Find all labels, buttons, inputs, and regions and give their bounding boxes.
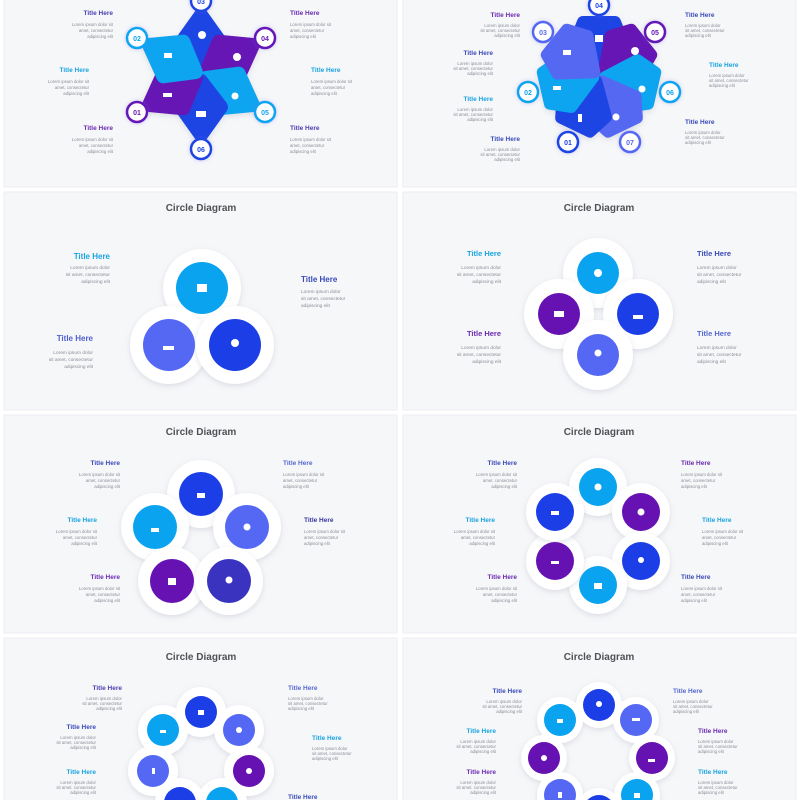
panel: six circles: Lorem ipsum dolor sit bbox=[681, 472, 723, 477]
panel: seven-petal diagram: Lorem ipsum dolor bbox=[457, 107, 494, 112]
text blocks bbox=[465, 460, 732, 581]
panel: seven circles: Lorem ipsum dolor bbox=[312, 746, 348, 751]
panel: six circles: adipiscing elit bbox=[469, 541, 496, 546]
panel: seven circles: Lorem ipsum dolor bbox=[60, 780, 97, 785]
text blocks: Title Here bbox=[83, 10, 113, 17]
panel: eight circles: adipiscing elit bbox=[470, 790, 497, 795]
icons bbox=[163, 31, 241, 117]
panel: seven-petal diagram: Lorem ipsum dolor bbox=[709, 73, 745, 78]
panel: seven circles: adipiscing elit bbox=[70, 790, 97, 795]
panel: three circles: Lorem ipsum dolor bbox=[301, 289, 341, 295]
panel: five circles: amet, consectetur bbox=[86, 478, 121, 483]
panel: five circles: Lorem ipsum dolor sit bbox=[304, 529, 346, 534]
heading: Circle Diagram bbox=[564, 203, 634, 214]
panel: seven circles: Lorem ipsum dolor bbox=[60, 735, 97, 740]
panel: six circles: adipiscing elit bbox=[491, 598, 518, 603]
text blocks: Title Here bbox=[74, 252, 111, 261]
panel: seven-petal diagram: Title Here bbox=[685, 119, 715, 126]
panel: five circles: adipiscing elit bbox=[304, 541, 331, 546]
text blocks: Title Here bbox=[92, 685, 122, 692]
panel: seven circles: sit amet, consectetur bbox=[82, 701, 123, 706]
panel: eight circles: adipiscing elit bbox=[470, 749, 497, 754]
panel: three circles: sit amet, consectetur bbox=[301, 296, 346, 302]
text blocks: Title Here bbox=[466, 728, 496, 735]
text blocks: Title Here bbox=[487, 460, 517, 467]
panel: five circles: adipiscing elit bbox=[94, 598, 121, 603]
panel: seven-petal diagram: adipiscing elit bbox=[467, 71, 494, 76]
panel: seven-petal diagram: adipiscing elit bbox=[494, 33, 521, 38]
text blocks: Title Here bbox=[492, 688, 522, 695]
panel: five circles bbox=[56, 427, 346, 615]
panel: six-petal diagram: amet, consectetur bbox=[55, 85, 90, 90]
text blocks: Title Here bbox=[301, 275, 338, 284]
text blocks: Title Here bbox=[67, 517, 97, 524]
panel: six-petal diagram: amet, consectetur bbox=[290, 28, 325, 33]
text blocks: Title Here bbox=[698, 728, 728, 735]
panel: five circles: amet, consectetur bbox=[86, 592, 121, 597]
panel: seven circles: Lorem ipsum dolor bbox=[288, 696, 324, 701]
panel: eight circles: sit amet, consectetur bbox=[673, 704, 713, 709]
panel: seven-petal diagram: adipiscing elit bbox=[685, 33, 712, 38]
panel: seven circles: sit amet, consectetur bbox=[56, 740, 97, 745]
panel: seven-petal diagram: sit amet, consectetur bbox=[453, 66, 494, 71]
panel: seven-petal diagram: 03 bbox=[539, 30, 547, 37]
circles bbox=[121, 460, 281, 615]
panel: six circles: amet, consectetur bbox=[681, 478, 716, 483]
panel: seven-petal diagram: Lorem ipsum dolor bbox=[484, 23, 521, 28]
text blocks: Title Here bbox=[467, 249, 501, 258]
panel: six-petal diagram: adipiscing elit bbox=[311, 91, 338, 96]
petals bbox=[139, 15, 263, 135]
panel: eight circles: sit amet, consectetur bbox=[456, 785, 497, 790]
panel: six-petal diagram: 01 bbox=[133, 110, 141, 117]
panel: six-petal diagram: amet, consectetur bbox=[311, 85, 346, 90]
panel: six-petal diagram: 05 bbox=[261, 110, 269, 117]
text blocks bbox=[467, 249, 731, 338]
panel: seven-petal diagram: Title Here bbox=[685, 12, 715, 19]
text blocks bbox=[466, 688, 728, 776]
panel: seven-petal diagram: 05 bbox=[651, 30, 659, 37]
panel: seven-petal diagram: 01 bbox=[564, 140, 572, 147]
text blocks: Title Here bbox=[466, 769, 496, 776]
panel: seven-petal diagram: 04 bbox=[595, 3, 603, 10]
panel: five circles: amet, consectetur bbox=[304, 535, 339, 540]
petals bbox=[541, 22, 657, 135]
panel: seven circles: adipiscing elit bbox=[288, 706, 315, 711]
panel: six-petal diagram: Lorem ipsum dolor sit bbox=[72, 137, 114, 142]
panel: seven-petal diagram: sit amet, consectetur bbox=[685, 28, 725, 33]
panel: eight circles: Lorem ipsum dolor bbox=[486, 699, 523, 704]
panel: seven-petal diagram: adipiscing elit bbox=[467, 117, 494, 122]
text blocks: Title Here bbox=[90, 574, 120, 581]
panel: six-petal diagram bbox=[48, 0, 353, 159]
panel: six circles: amet, consectetur bbox=[702, 535, 737, 540]
panel: three circles: sit amet, consectetur bbox=[66, 272, 110, 278]
text blocks bbox=[59, 10, 113, 132]
circles bbox=[524, 238, 673, 390]
panel: seven circles: adipiscing elit bbox=[312, 756, 339, 761]
panel: seven circles: Lorem ipsum dolor bbox=[86, 696, 123, 701]
panel: seven circles: sit amet, consectetur bbox=[288, 701, 328, 706]
panel: seven-petal diagram: Lorem ipsum dolor bbox=[685, 23, 721, 28]
panel: eight circles: adipiscing elit bbox=[698, 749, 725, 754]
panel: seven circles: sit amet, consectetur bbox=[312, 751, 352, 756]
panel: six-petal diagram: Title Here bbox=[290, 10, 320, 17]
panel: four circles bbox=[457, 203, 742, 390]
text blocks: Title Here bbox=[59, 67, 89, 74]
text blocks: Title Here bbox=[463, 50, 493, 57]
panel: eight circles: sit amet, consectetur bbox=[698, 785, 738, 790]
panel: seven-petal diagram bbox=[453, 0, 749, 162]
panel: six circles: amet, consectetur bbox=[483, 478, 518, 483]
panel: six-petal diagram: 02 bbox=[133, 36, 141, 43]
panel: seven-petal diagram: Lorem ipsum dolor bbox=[685, 130, 721, 135]
panel: six circles: Lorem ipsum dolor sit bbox=[476, 586, 518, 591]
heading: Circle Diagram bbox=[564, 427, 634, 438]
panel: seven circles: sit amet, consectetur bbox=[56, 785, 97, 790]
panel: three circles: adipiscing elit bbox=[64, 364, 94, 370]
panel: eight circles: Lorem ipsum dolor bbox=[460, 780, 497, 785]
panel: eight circles: sit amet, consectetur bbox=[482, 704, 523, 709]
panel: seven circles bbox=[56, 652, 352, 800]
panel: five circles: amet, consectetur bbox=[63, 535, 98, 540]
panel: eight circles: Lorem ipsum dolor bbox=[460, 739, 497, 744]
panel: eight circles: Lorem ipsum dolor bbox=[698, 739, 734, 744]
panel: six-petal diagram: Title Here bbox=[290, 125, 320, 132]
text blocks: Title Here bbox=[702, 517, 732, 524]
number badges bbox=[518, 0, 680, 152]
panel: seven-petal diagram: 06 bbox=[666, 90, 674, 97]
panel: four circles: sit amet, consectetur bbox=[457, 352, 501, 358]
panel: six-petal diagram: amet, consectetur bbox=[79, 143, 114, 148]
panel: six-petal diagram: adipiscing elit bbox=[290, 149, 317, 154]
panel: four circles: adipiscing elit bbox=[472, 279, 502, 285]
panel: seven-petal diagram: 07 bbox=[626, 140, 634, 147]
panel: three circles: adipiscing elit bbox=[81, 279, 111, 285]
text blocks: Title Here bbox=[487, 574, 517, 581]
text blocks: Title Here bbox=[66, 724, 96, 731]
text blocks: Title Here bbox=[697, 329, 731, 338]
text blocks: Title Here bbox=[288, 685, 318, 692]
panel: three circles: sit amet, consectetur bbox=[49, 357, 93, 363]
panel: six-petal diagram: Lorem ipsum dolor sit bbox=[290, 22, 332, 27]
panel: eight circles: adipiscing elit bbox=[698, 790, 725, 795]
text blocks bbox=[67, 460, 334, 581]
text blocks: Title Here bbox=[490, 136, 520, 143]
panel: seven-petal diagram: sit amet, consectetur bbox=[709, 78, 749, 83]
panel: five circles: Lorem ipsum dolor sit bbox=[283, 472, 325, 477]
icons bbox=[553, 35, 646, 122]
panel: five circles: adipiscing elit bbox=[283, 484, 310, 489]
text blocks: Title Here bbox=[304, 517, 334, 524]
panel: three circles: Lorem ipsum dolor bbox=[70, 265, 110, 271]
panel: six-petal diagram: Title Here bbox=[311, 67, 341, 74]
text blocks: Title Here bbox=[681, 574, 711, 581]
panel: six-petal diagram: adipiscing elit bbox=[63, 91, 90, 96]
panel: three circles: adipiscing elit bbox=[301, 303, 330, 309]
panel: six circles bbox=[454, 427, 744, 614]
panel: seven-petal diagram: Lorem ipsum dolor bbox=[484, 147, 521, 152]
panel: eight circles: sit amet, consectetur bbox=[698, 744, 738, 749]
text blocks: Title Here bbox=[283, 460, 313, 467]
panel: seven-petal diagram: 02 bbox=[524, 90, 532, 97]
circles bbox=[526, 458, 670, 614]
text blocks: Title Here bbox=[463, 96, 493, 103]
panel: seven-petal diagram: sit amet, consectetur bbox=[480, 152, 521, 157]
panel: four circles: Lorem ipsum dolor bbox=[697, 265, 737, 271]
panel: six circles: Lorem ipsum dolor sit bbox=[476, 472, 518, 477]
panel: six-petal diagram: amet, consectetur bbox=[290, 143, 325, 148]
panel: seven-petal diagram: sit amet, consectetur bbox=[453, 112, 494, 117]
panel: seven-petal diagram: adipiscing elit bbox=[709, 83, 736, 88]
panel: six-petal diagram: Lorem ipsum dolor sit bbox=[311, 79, 353, 84]
heading: Circle Diagram bbox=[166, 652, 236, 663]
panel: four circles: adipiscing elit bbox=[697, 279, 726, 285]
panel: five circles: adipiscing elit bbox=[71, 541, 98, 546]
panel: seven-petal diagram: sit amet, consectetur bbox=[685, 135, 725, 140]
panel: four circles: Lorem ipsum dolor bbox=[461, 345, 501, 351]
panel: three circles: Lorem ipsum dolor bbox=[53, 350, 93, 356]
panel: six circles: Lorem ipsum dolor sit bbox=[681, 586, 723, 591]
panel: five circles: amet, consectetur bbox=[283, 478, 318, 483]
text blocks: Title Here bbox=[681, 460, 711, 467]
panel: eight circles: Lorem ipsum dolor bbox=[698, 780, 734, 785]
panel: seven-petal diagram: Title Here bbox=[709, 62, 739, 69]
panel: four circles: sit amet, consectetur bbox=[697, 272, 742, 278]
text blocks: Title Here bbox=[697, 249, 731, 258]
text blocks: Title Here bbox=[57, 334, 94, 343]
panel: six-petal diagram: amet, consectetur bbox=[79, 28, 114, 33]
text blocks: Title Here bbox=[465, 517, 495, 524]
panel: seven-petal diagram: Lorem ipsum dolor bbox=[457, 61, 494, 66]
panel: eight circles: adipiscing elit bbox=[673, 709, 700, 714]
panel: five circles: Lorem ipsum dolor sit bbox=[79, 586, 121, 591]
panel: four circles: sit amet, consectetur bbox=[457, 272, 501, 278]
panel: four circles: Lorem ipsum dolor bbox=[461, 265, 501, 271]
number badges bbox=[127, 0, 275, 159]
panel: six-petal diagram: adipiscing elit bbox=[290, 34, 317, 39]
panel: six-petal diagram: 06 bbox=[197, 147, 205, 154]
panel: seven-petal diagram: adipiscing elit bbox=[685, 140, 712, 145]
heading: Circle Diagram bbox=[564, 652, 634, 663]
panel: six circles: Lorem ipsum dolor sit bbox=[702, 529, 744, 534]
panel: six circles: Lorem ipsum dolor sit bbox=[454, 529, 496, 534]
text blocks: Title Here bbox=[490, 12, 520, 19]
panel: six-petal diagram: Lorem ipsum dolor sit bbox=[48, 79, 90, 84]
panel: seven-petal diagram: sit amet, consectetur bbox=[480, 28, 521, 33]
panel: eight circles: Lorem ipsum dolor bbox=[673, 699, 709, 704]
text blocks: Title Here bbox=[673, 688, 703, 695]
panel: five circles: adipiscing elit bbox=[94, 484, 121, 489]
text blocks: Title Here bbox=[312, 735, 342, 742]
panel: four circles: Lorem ipsum dolor bbox=[697, 345, 737, 351]
text blocks bbox=[66, 685, 342, 800]
panel: seven circles: adipiscing elit bbox=[96, 706, 123, 711]
panel: six circles: adipiscing elit bbox=[702, 541, 729, 546]
panel: seven-petal diagram: adipiscing elit bbox=[494, 157, 521, 162]
panel: four circles: sit amet, consectetur bbox=[697, 352, 742, 358]
heading: Circle Diagram bbox=[166, 427, 236, 438]
panel: six-petal diagram: Lorem ipsum dolor sit bbox=[290, 137, 332, 142]
text blocks: Title Here bbox=[66, 769, 96, 776]
panel: six circles: amet, consectetur bbox=[483, 592, 518, 597]
panel: six-petal diagram: 04 bbox=[261, 36, 269, 43]
panel: six circles: adipiscing elit bbox=[681, 598, 708, 603]
panel: six-petal diagram: Lorem ipsum dolor sit bbox=[72, 22, 114, 27]
panel: eight circles bbox=[456, 652, 738, 800]
panel: four circles: adipiscing elit bbox=[697, 359, 726, 365]
panel: six circles: amet, consectetur bbox=[461, 535, 496, 540]
text blocks: Title Here bbox=[698, 769, 728, 776]
circles bbox=[128, 687, 274, 800]
text blocks: Title Here bbox=[83, 125, 113, 132]
panel: eight circles: sit amet, consectetur bbox=[456, 744, 497, 749]
text blocks: Title Here bbox=[467, 329, 501, 338]
panel: three circles bbox=[49, 203, 346, 384]
panel: six circles: adipiscing elit bbox=[681, 484, 708, 489]
text blocks bbox=[57, 252, 338, 343]
circles bbox=[130, 249, 274, 384]
panel: eight circles: adipiscing elit bbox=[496, 709, 523, 714]
panel: seven circles: adipiscing elit bbox=[70, 745, 97, 750]
panel: six-petal diagram: adipiscing elit bbox=[87, 34, 114, 39]
panel: four circles: adipiscing elit bbox=[472, 359, 502, 365]
panel: five circles: Lorem ipsum dolor sit bbox=[56, 529, 98, 534]
panel: six circles: amet, consectetur bbox=[681, 592, 716, 597]
text blocks: Title Here bbox=[90, 460, 120, 467]
heading: Circle Diagram bbox=[166, 203, 236, 214]
panel: six circles: adipiscing elit bbox=[491, 484, 518, 489]
panel: six-petal diagram: adipiscing elit bbox=[87, 149, 114, 154]
circles bbox=[521, 682, 675, 800]
panel: five circles: Lorem ipsum dolor sit bbox=[79, 472, 121, 477]
text blocks bbox=[463, 12, 520, 143]
